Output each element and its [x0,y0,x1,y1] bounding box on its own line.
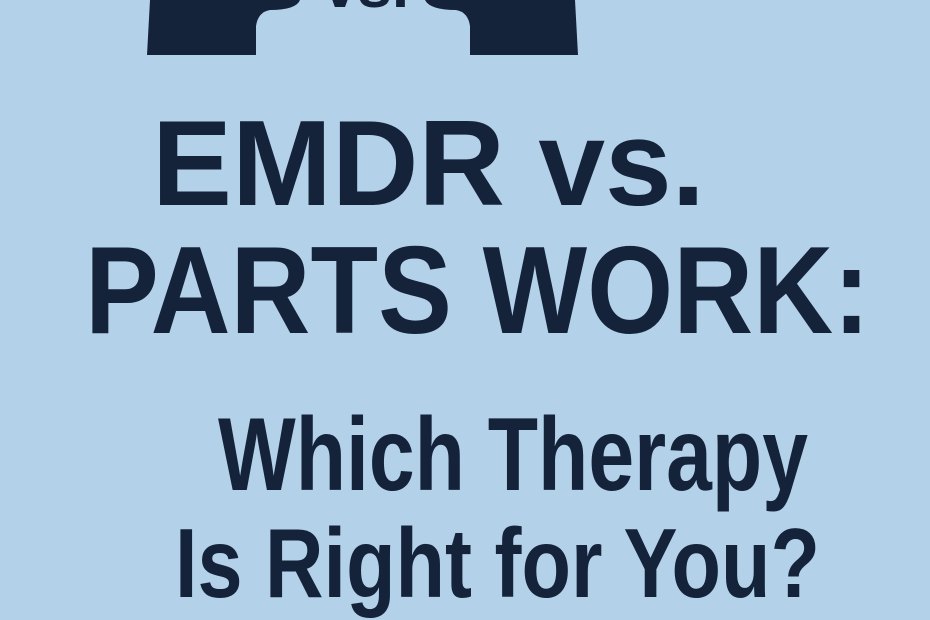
icon: right head silhouette [425,0,578,55]
icon: left head silhouette [147,0,300,55]
title line 1: EMDR vs. [152,95,705,231]
